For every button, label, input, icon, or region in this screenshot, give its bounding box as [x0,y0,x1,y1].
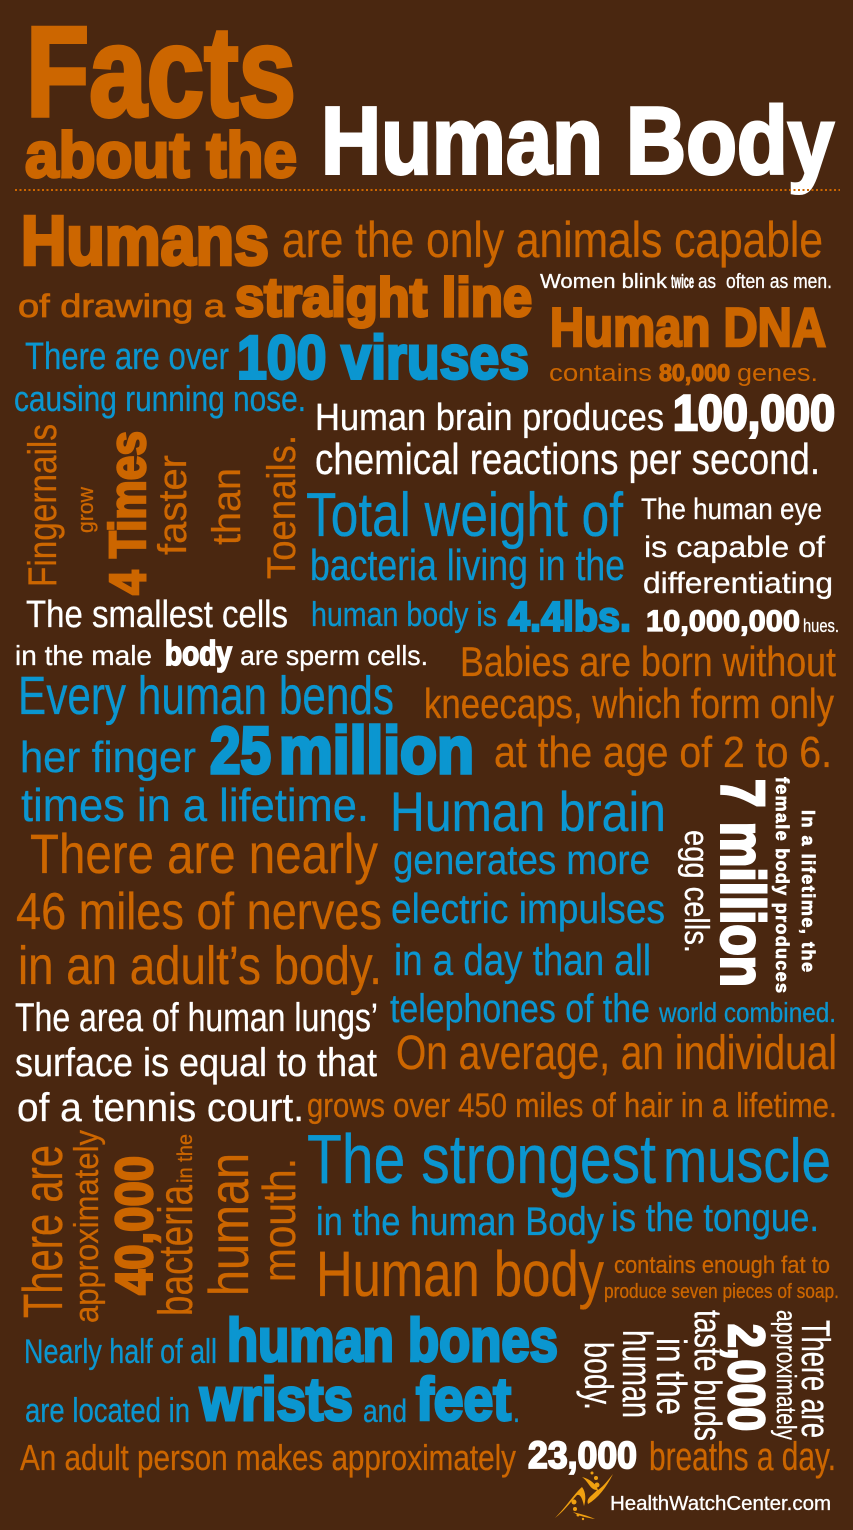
fact: taste buds: taste buds [686,1310,728,1441]
fact: nerves: in an adult’s body. [18,936,382,996]
fact: human eye: 10,000,000 [646,605,800,638]
fact: bacteria weight: Total weight of [306,481,624,550]
fact: nerves: 46 miles of nerves [16,883,382,941]
fact: mouth bacteria: human [197,1153,260,1296]
fact: taste buds: body. [576,1342,620,1410]
fact: sperm cells: in the male [15,640,152,671]
fact: taste buds: in the [648,1338,695,1415]
fact: mouth bacteria: 40,000 [106,1156,164,1295]
fact: viruses: There are over [25,336,229,378]
fact: fingernails: Fingernails [21,424,65,587]
fact: taste buds: There are [793,1320,837,1438]
title: about the [25,119,297,191]
fact: strongest muscle: is the tongue. [611,1196,819,1240]
fact: sperm cells: are sperm cells. [240,640,428,671]
logo: HealthWatchCenter [555,1472,831,1520]
fact: bones: wrists [199,1366,353,1433]
fact: fingernails: grow [73,487,98,533]
fact: taste buds: 2,000 [718,1324,775,1431]
fact: fingernails: than [205,468,249,545]
fact: viruses: 100 viruses [237,324,529,392]
fact: breaths [20,1435,836,1479]
fact: kneecaps [424,638,836,777]
fact: bones [24,1307,558,1433]
fact: straight line: Humans [21,202,269,280]
fact: egg cells: 7 million [708,779,776,987]
fact: breaths: 23,000 [528,1435,637,1477]
fact: brain reactions [315,385,835,484]
fact: human eye: is capable of [644,531,826,564]
icon: swirl mark [555,1472,613,1520]
fact: human eye: hues. [803,616,839,636]
fact: brain reactions: Human brain produces [315,397,664,439]
fact: fat and soap: contains enough fat to [614,1252,830,1279]
fact: finger bends [18,666,474,831]
fact: strongest muscle [307,1120,831,1244]
fact: nerves [16,822,382,996]
fact: nerves: There are nearly [30,822,378,885]
fact: finger bends: her finger [20,733,196,782]
fact: taste buds [576,1310,837,1441]
fact: fat and soap: Human body [316,1238,604,1310]
fact: fingernails [21,424,304,595]
fact: women blink: twice [671,272,694,293]
fact: lungs: surface is equal to that [15,1041,377,1085]
fact: finger bends: 25 [210,713,271,787]
fact: bones: human bones [227,1307,558,1374]
fact: strongest muscle: in the human Body [316,1200,604,1244]
fact: mouth bacteria: in the [174,1134,197,1183]
fact: human DNA: contains [549,360,652,387]
fact: bones: Nearly half of all [24,1333,217,1371]
fact: human eye [641,493,839,638]
fact: sperm cells: The smallest cells [26,594,288,636]
fact: women blink: as [698,271,716,293]
fact: electric impulses [390,780,836,1031]
fact: egg cells: female body produces [772,777,792,993]
fact: human eye: differentiating [643,567,833,600]
fact: mouth bacteria: bacteria [150,1185,203,1316]
fact: lungs: of a tennis court. [17,1086,304,1130]
fact: electric impulses: telephones of the [390,987,650,1031]
fact: human eye: The human eye [641,493,822,526]
fact: mouth bacteria: approximately [68,1130,106,1323]
fact: women blink: Women blink [540,271,668,293]
fact: fingernails: Toenails. [260,435,304,579]
fact: egg cells: In a lifetime, the [798,810,818,972]
fact: sperm cells: body [165,635,232,673]
fact: lungs: The area of human lungs’ [15,996,378,1040]
fact: lungs [15,996,378,1130]
fact: straight line: of drawing a [18,288,225,324]
fact: bones: . [513,1393,520,1429]
fact: mouth bacteria: mouth. [253,1158,305,1282]
fact: taste buds: human [614,1330,661,1418]
fact: breaths: An adult person makes approximately [20,1437,516,1478]
fact: bones: feet [416,1366,511,1433]
title [25,1,834,194]
fact: finger bends: times in a lifetime. [21,779,369,831]
logo: HealthWatchCenter: HealthWatchCenter.com [610,1493,831,1515]
fact: human DNA: 80,000 [659,360,730,387]
fact: straight line [18,202,823,328]
fact: electric impulses: Human brain [390,780,666,843]
fact: fingernails: 4 Times [99,431,156,595]
fact: fingernails: faster [151,455,195,555]
fact: bacteria weight: human body is [311,596,497,634]
title: Facts [26,1,296,144]
fact: egg cells [677,777,818,993]
fact: electric impulses: generates more [393,836,650,883]
fact: electric impulses: electric impulses [391,885,665,932]
fact: women blink: often as men. [726,271,832,293]
fact: mouth bacteria: There are [11,1145,74,1318]
fact: electric impulses: in a day than all [394,936,651,985]
fact: bones: and [363,1393,407,1429]
fact: brain reactions: 100,000 [673,385,835,441]
fact: finger bends: Every human bends [18,666,394,726]
fact: strongest muscle: The strongest [307,1120,656,1198]
fact: human DNA [549,296,826,387]
fact: bacteria weight: bacteria living in the [310,541,625,590]
fact: viruses [14,324,529,419]
fact: bacteria weight [306,481,631,640]
fact: mouth bacteria [11,1130,305,1323]
fact: bacteria weight: 4.4lbs. [508,593,631,640]
fact: women blink [540,271,832,293]
fact: bones: are located in [25,1392,190,1430]
fact: straight line: straight line [235,266,532,328]
fact: egg cells: egg cells. [677,830,715,953]
fact: taste buds: approximately [771,1310,802,1440]
fact: hair [307,1027,837,1125]
fact: finger bends: million [279,713,474,787]
fact: human DNA: genes. [737,360,818,387]
fact: fat and soap [316,1238,839,1310]
fact: viruses: causing running nose. [14,378,306,419]
fact: sperm cells [15,594,428,673]
